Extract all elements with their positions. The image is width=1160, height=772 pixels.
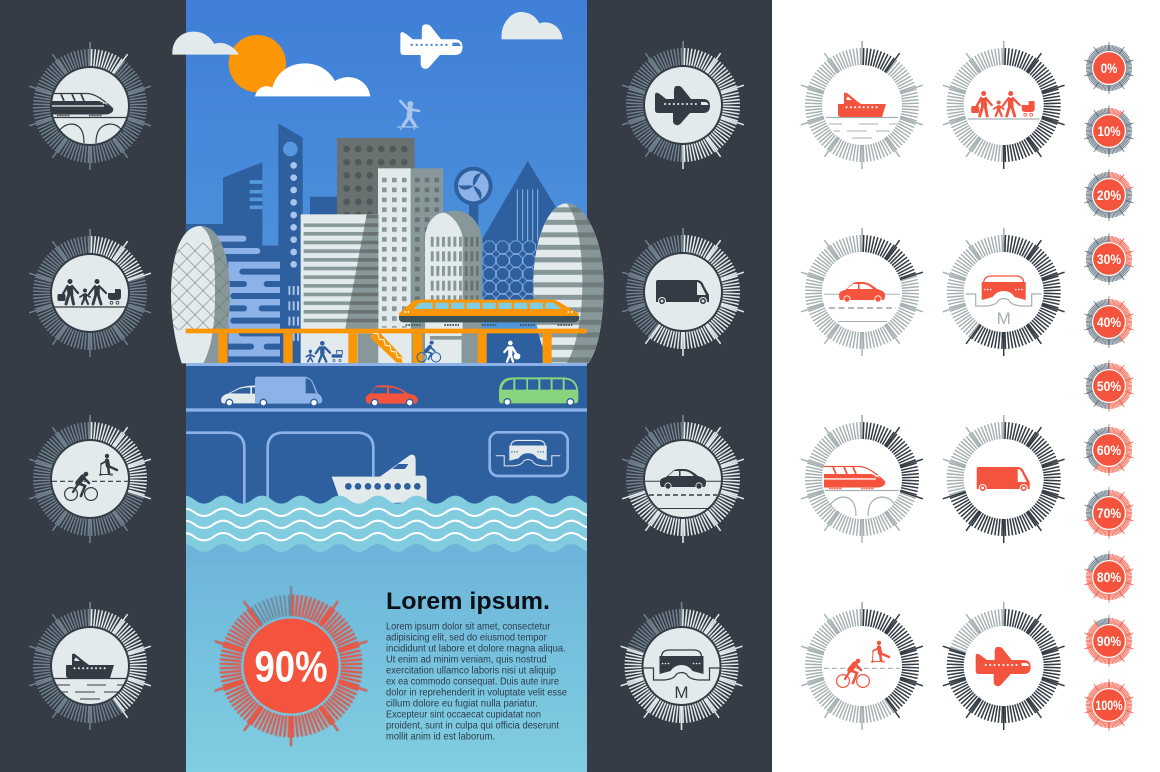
small gauge: 10 percent: 10% (1097, 124, 1121, 139)
icon: green bus (499, 377, 578, 405)
arches (182, 433, 373, 503)
icon: cyclist under bridge (417, 341, 441, 362)
background: dark left column (0, 0, 186, 772)
building: dark dotted tower (337, 138, 415, 218)
icon: round sign on pole (454, 167, 493, 227)
small gauge: 50 percent (1084, 360, 1134, 412)
icon: cloud left (172, 32, 239, 55)
icon: scooter (872, 641, 889, 663)
building: grey tower (411, 168, 443, 335)
body text: dolor in reprehenderit in voluptate velit esse (386, 688, 567, 699)
under-bridge fills (358, 333, 543, 363)
small gauge: 0 percent: 0% (1101, 61, 1117, 76)
building: small blue block (310, 197, 337, 217)
icon: family under bridge (306, 341, 342, 362)
small gauge: 30 percent (1084, 233, 1134, 285)
icon: ship (838, 93, 886, 117)
body text: mollit anim id est laborum. (386, 732, 495, 743)
icon: plane (976, 647, 1031, 686)
small gauge: 90 percent: 90% (1097, 634, 1121, 649)
icon: ship (332, 455, 427, 505)
small gauge: 30 percent: 30% (1097, 252, 1121, 267)
small gauge: 90 percent (1080, 612, 1138, 670)
panel: lower text background (186, 540, 587, 772)
gauge: white car 20 percent (801, 228, 924, 356)
gauge: white family 50 percent (942, 41, 1065, 169)
icon: plane (655, 86, 710, 125)
gauge: metro 80 percent (620, 602, 743, 730)
icon: skateboarder (398, 101, 419, 130)
icon: cyclist (837, 659, 869, 687)
building: striped egg right (533, 203, 604, 363)
gauge: train 10 percent (29, 42, 151, 170)
background: dark middle column (587, 0, 772, 772)
body text: exercitation ullamco laboris nisi ut aliquip (386, 666, 556, 677)
small gauge: 10 percent (1084, 105, 1134, 157)
icon: metro (966, 276, 1042, 306)
icon: cloud right (502, 12, 563, 39)
icon: sun (229, 35, 286, 92)
icon: family (971, 91, 1035, 116)
road line (182, 408, 595, 412)
building: domed block (425, 211, 482, 335)
sky (186, 0, 587, 364)
big percent value: 90% (254, 643, 328, 692)
body text: adipisicing elit, sed do eiusmod tempor (386, 633, 547, 644)
icon: car (660, 469, 706, 490)
icon: train (824, 466, 899, 516)
background: white right column (772, 0, 1160, 772)
body text: incididunt ut labore et dolore magna aliqua. (386, 644, 566, 655)
small gauge: 40 percent (1084, 296, 1134, 348)
icon: scooter (100, 454, 117, 476)
gauge: white train 30 percent (801, 415, 924, 543)
gauge: truck 60 percent (622, 228, 744, 356)
body text (386, 622, 567, 743)
icon: ship (66, 654, 114, 678)
building: blue tower block (186, 123, 303, 363)
icon: truck (656, 280, 709, 305)
small gauge: 80 percent: 80% (1097, 570, 1121, 585)
icon: car (839, 282, 885, 303)
body text: Excepteur sint occaecat cupidatat non (386, 710, 541, 721)
wave lines (175, 509, 600, 540)
small gauge: 20 percent (1084, 169, 1134, 221)
gauge: family 20 percent (29, 229, 152, 357)
gauge: white bike 40 percent (801, 602, 924, 730)
stairs (371, 331, 403, 363)
small gauge: 80 percent (1084, 551, 1134, 603)
body text: Lorem ipsum dolor sit amet, consectetur (386, 622, 551, 633)
small gauge: 0 percent (1080, 39, 1138, 97)
building: wavy stripes (215, 239, 280, 363)
small gauge: 60 percent (1084, 424, 1134, 476)
ground line (182, 363, 595, 366)
gauge: ship 40 percent (29, 602, 152, 730)
small gauge: 100 percent (1080, 676, 1138, 734)
building: gherkin left (171, 226, 230, 363)
building: white tower (378, 168, 411, 335)
bridge (186, 329, 587, 363)
icon: pedestrian (504, 341, 520, 362)
wave lower edge (186, 544, 587, 556)
road background (182, 363, 595, 510)
gauge: white truck 70 percent (942, 415, 1065, 543)
metro sign frame (490, 432, 568, 476)
panel: city skyline (171, 12, 604, 363)
icon: sky plane (400, 24, 463, 69)
icon: metro (644, 650, 720, 680)
icon: metro sign (496, 440, 560, 466)
icon: monorail train (399, 300, 579, 325)
icon: red car (366, 385, 418, 406)
icon: white car (221, 385, 257, 406)
gauge: white plane 80 percent (942, 602, 1065, 730)
icon: train (52, 94, 127, 143)
icon: truck (977, 467, 1030, 492)
gauge: white ship 10 percent (801, 41, 923, 169)
body text: cillum dolore eu fugiat nulla pariatur. (386, 699, 538, 710)
small gauge: 60 percent: 60% (1097, 443, 1121, 458)
small gauge: 70 percent: 70% (1097, 506, 1121, 521)
small gauge: 50 percent: 50% (1097, 379, 1121, 394)
gauge: plane 50 percent (622, 41, 744, 169)
body text: ex ea commodo consequat. Duis aute irure (386, 677, 559, 688)
gauge: bike 30 percent (29, 415, 152, 543)
building: wide striped block (301, 214, 378, 363)
heading: Lorem ipsum. (386, 588, 550, 615)
icon: cloud white (255, 63, 370, 96)
building: triangular tower (483, 161, 557, 300)
panel: road and water (186, 363, 587, 552)
small gauge: 100 percent: 100% (1095, 698, 1123, 713)
body text: proident, sunt in culpa qui officia deserunt (386, 721, 559, 732)
gauge: white metro 60 percent: M (997, 309, 1011, 328)
icon: van (255, 377, 322, 406)
gauge: car 70 percent (622, 415, 744, 543)
small gauge: 20 percent: 20% (1097, 188, 1121, 203)
icon: family (58, 279, 121, 304)
small gauge: 70 percent (1084, 487, 1134, 539)
water (186, 496, 587, 552)
small gauge: 40 percent: 40% (1097, 315, 1121, 330)
icon: cyclist (65, 472, 97, 500)
gauge: white metro 60 percent (942, 228, 1065, 356)
gauge: big 90 percent (214, 586, 368, 747)
body text: Ut enim ad minim veniam, quis nostrud (386, 655, 547, 666)
gauge: metro 80 percent: M (674, 683, 689, 702)
